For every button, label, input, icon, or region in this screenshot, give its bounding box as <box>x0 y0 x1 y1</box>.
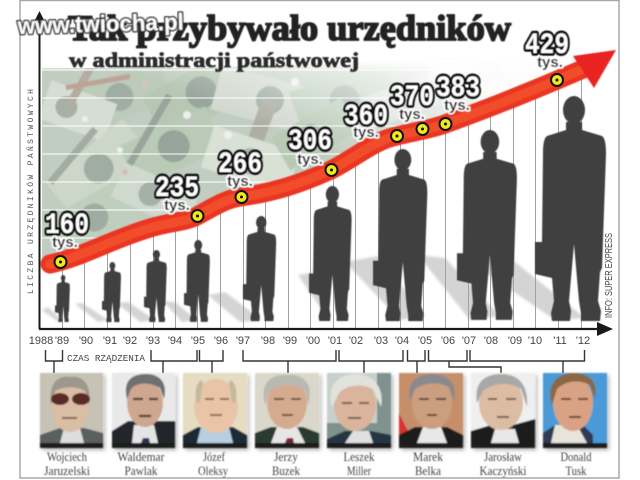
year axis labels: '08 <box>484 335 498 347</box>
marker 2006 <box>440 118 452 130</box>
name: Jarosław Kaczyński: Kaczyński <box>480 463 527 478</box>
year axis labels: 1988 <box>29 335 53 347</box>
silhouette 2001 <box>309 186 352 321</box>
year axis labels: '94 <box>168 335 182 347</box>
name: Józef Oleksy: Józef <box>203 449 226 464</box>
bracket Pawlak <box>151 350 197 373</box>
portrait: Belka <box>399 373 463 448</box>
value 370: 370 <box>390 81 434 115</box>
marker 2001 <box>326 164 338 176</box>
name: Józef Oleksy <box>198 449 228 478</box>
value 383: tys. <box>444 97 470 114</box>
year axis labels: '02 <box>349 335 363 347</box>
marker 2004 <box>391 130 403 142</box>
bracket Jaruzelski <box>46 350 62 373</box>
value 360 <box>344 100 388 141</box>
silhouette 2011 <box>535 96 606 321</box>
silhouette 1989 <box>55 275 70 322</box>
name: Leszek Miller: Leszek <box>344 449 375 464</box>
value 235: 235 <box>155 172 199 206</box>
value 360: 360 <box>344 100 388 134</box>
silhouette 1991 <box>102 262 121 322</box>
axes <box>35 11 613 336</box>
bracket Buzek <box>243 350 336 373</box>
axis label: number of officials: LICZBA URZĘDNIKÓW PAŃSTWOWYCH <box>26 89 36 294</box>
silhouette 1997 <box>243 216 276 321</box>
year axis labels: '12 <box>576 335 590 347</box>
vertical axis arrow <box>35 11 44 329</box>
name: Donald Tusk: Tusk <box>566 463 587 478</box>
name: Marek Belka: Belka <box>415 463 441 478</box>
marker 2011 <box>551 74 563 86</box>
year axis labels <box>29 335 590 347</box>
name: Wojciech Jaruzelski <box>44 449 90 478</box>
value 429 <box>525 29 569 71</box>
value 160 <box>45 209 89 251</box>
marker 2005 <box>416 123 428 135</box>
portrait: Tusk <box>543 373 607 448</box>
red growth arrow <box>50 50 616 264</box>
year axis labels: '06 <box>441 335 455 347</box>
data point markers <box>54 74 563 268</box>
bracket Tusk <box>470 350 584 373</box>
value 266: 266 <box>218 148 262 182</box>
year axis labels: '01 <box>328 335 342 347</box>
year axis labels: '07 <box>462 335 476 347</box>
name: Waldemar Pawlak: Pawlak <box>124 463 158 478</box>
portrait: Oleksy <box>183 373 247 448</box>
name: Wojciech Jaruzelski: Jaruzelski <box>44 463 90 478</box>
name: Jerzy Buzek: Buzek <box>272 463 300 478</box>
bracket Belka <box>408 350 425 373</box>
value 370 <box>390 81 434 123</box>
year axis labels: '00 <box>306 335 320 347</box>
silhouettes of growing workforce <box>55 96 606 322</box>
portraits <box>40 373 607 448</box>
year axis labels: '11 <box>553 335 567 347</box>
value 429: 429 <box>525 29 569 63</box>
name: Donald Tusk: Donald <box>560 449 592 464</box>
silhouette 2004 <box>373 149 427 321</box>
year axis labels: '09 <box>508 335 522 347</box>
silhouette 2008 <box>457 130 517 320</box>
bracket Miller <box>339 350 403 373</box>
value 306: tys. <box>297 151 323 168</box>
value 160: 160 <box>45 209 89 243</box>
name: Donald Tusk <box>560 449 592 478</box>
value 383: 383 <box>436 72 480 106</box>
marker 1997 <box>236 191 248 203</box>
value 306 <box>288 125 332 168</box>
year grid lines <box>62 78 582 329</box>
name: Waldemar Pawlak <box>118 449 165 478</box>
value 235 <box>155 172 199 214</box>
portrait: Kaczyński <box>471 373 535 448</box>
bracket Oleksy <box>200 350 223 373</box>
year axis labels: '95 <box>191 335 205 347</box>
name: Józef Oleksy: Oleksy <box>198 463 228 478</box>
year axis labels: '04 <box>395 335 409 347</box>
name: Jarosław Kaczyński: Jarosław <box>484 449 523 464</box>
source credit: INFO: SUPER EXPRESS <box>604 233 615 318</box>
silhouette 1995 <box>184 240 210 322</box>
name: Marek Belka <box>413 449 443 478</box>
value 306: 306 <box>288 125 332 159</box>
year axis labels: '90 <box>79 335 93 347</box>
watermark: www.twiocha.pl <box>16 9 184 39</box>
year axis labels: '03 <box>374 335 388 347</box>
marker 1995 <box>192 210 204 222</box>
value 383 <box>436 72 480 114</box>
value 360: tys. <box>353 124 379 141</box>
term of office caption: CZAS RZĄDZENIA <box>67 354 146 364</box>
subtitle: w administracji państwowej <box>69 48 359 72</box>
year axis labels: '93 <box>146 335 160 347</box>
name: Waldemar Pawlak: Waldemar <box>118 449 165 464</box>
year axis labels: '96 <box>214 335 228 347</box>
value 235: tys. <box>164 197 190 214</box>
year axis labels: '05 <box>418 335 432 347</box>
year axis labels: '92 <box>123 335 137 347</box>
silhouette 1993 <box>144 250 167 322</box>
year axis labels: '97 <box>236 335 250 347</box>
title: Tak przybywało urzędników <box>68 8 511 48</box>
bracket Kaczyński <box>428 350 501 373</box>
name: Wojciech Jaruzelski: Wojciech <box>47 449 87 464</box>
name: Leszek Miller <box>344 449 375 478</box>
name: Marek Belka: Marek <box>413 449 443 464</box>
name: Jarosław Kaczyński <box>480 449 527 478</box>
silhouette ground shadows <box>42 255 585 322</box>
year axis labels: '98 <box>261 335 275 347</box>
portrait: Buzek <box>255 373 319 448</box>
value 429: tys. <box>537 54 563 71</box>
portrait: Miller <box>327 373 391 448</box>
year axis labels: '99 <box>283 335 297 347</box>
value 266 <box>218 148 262 190</box>
value labels <box>45 29 569 251</box>
name: Jerzy Buzek: Jerzy <box>274 449 298 464</box>
year axis labels: '91 <box>103 335 117 347</box>
year axis labels: '10 <box>528 335 542 347</box>
horizontal axis arrow <box>39 322 613 336</box>
names <box>44 449 592 478</box>
value 370: tys. <box>399 106 425 123</box>
year axis labels: '89 <box>55 335 69 347</box>
portrait: Jaruzelski <box>40 373 103 448</box>
banknote background <box>42 52 576 260</box>
portrait: Pawlak <box>112 373 175 448</box>
name: Jerzy Buzek <box>272 449 300 478</box>
marker 1989 <box>54 256 66 268</box>
value 266: tys. <box>227 173 253 190</box>
term brackets <box>46 350 584 373</box>
name: Leszek Miller: Miller <box>347 463 371 478</box>
value 160: tys. <box>52 234 78 251</box>
